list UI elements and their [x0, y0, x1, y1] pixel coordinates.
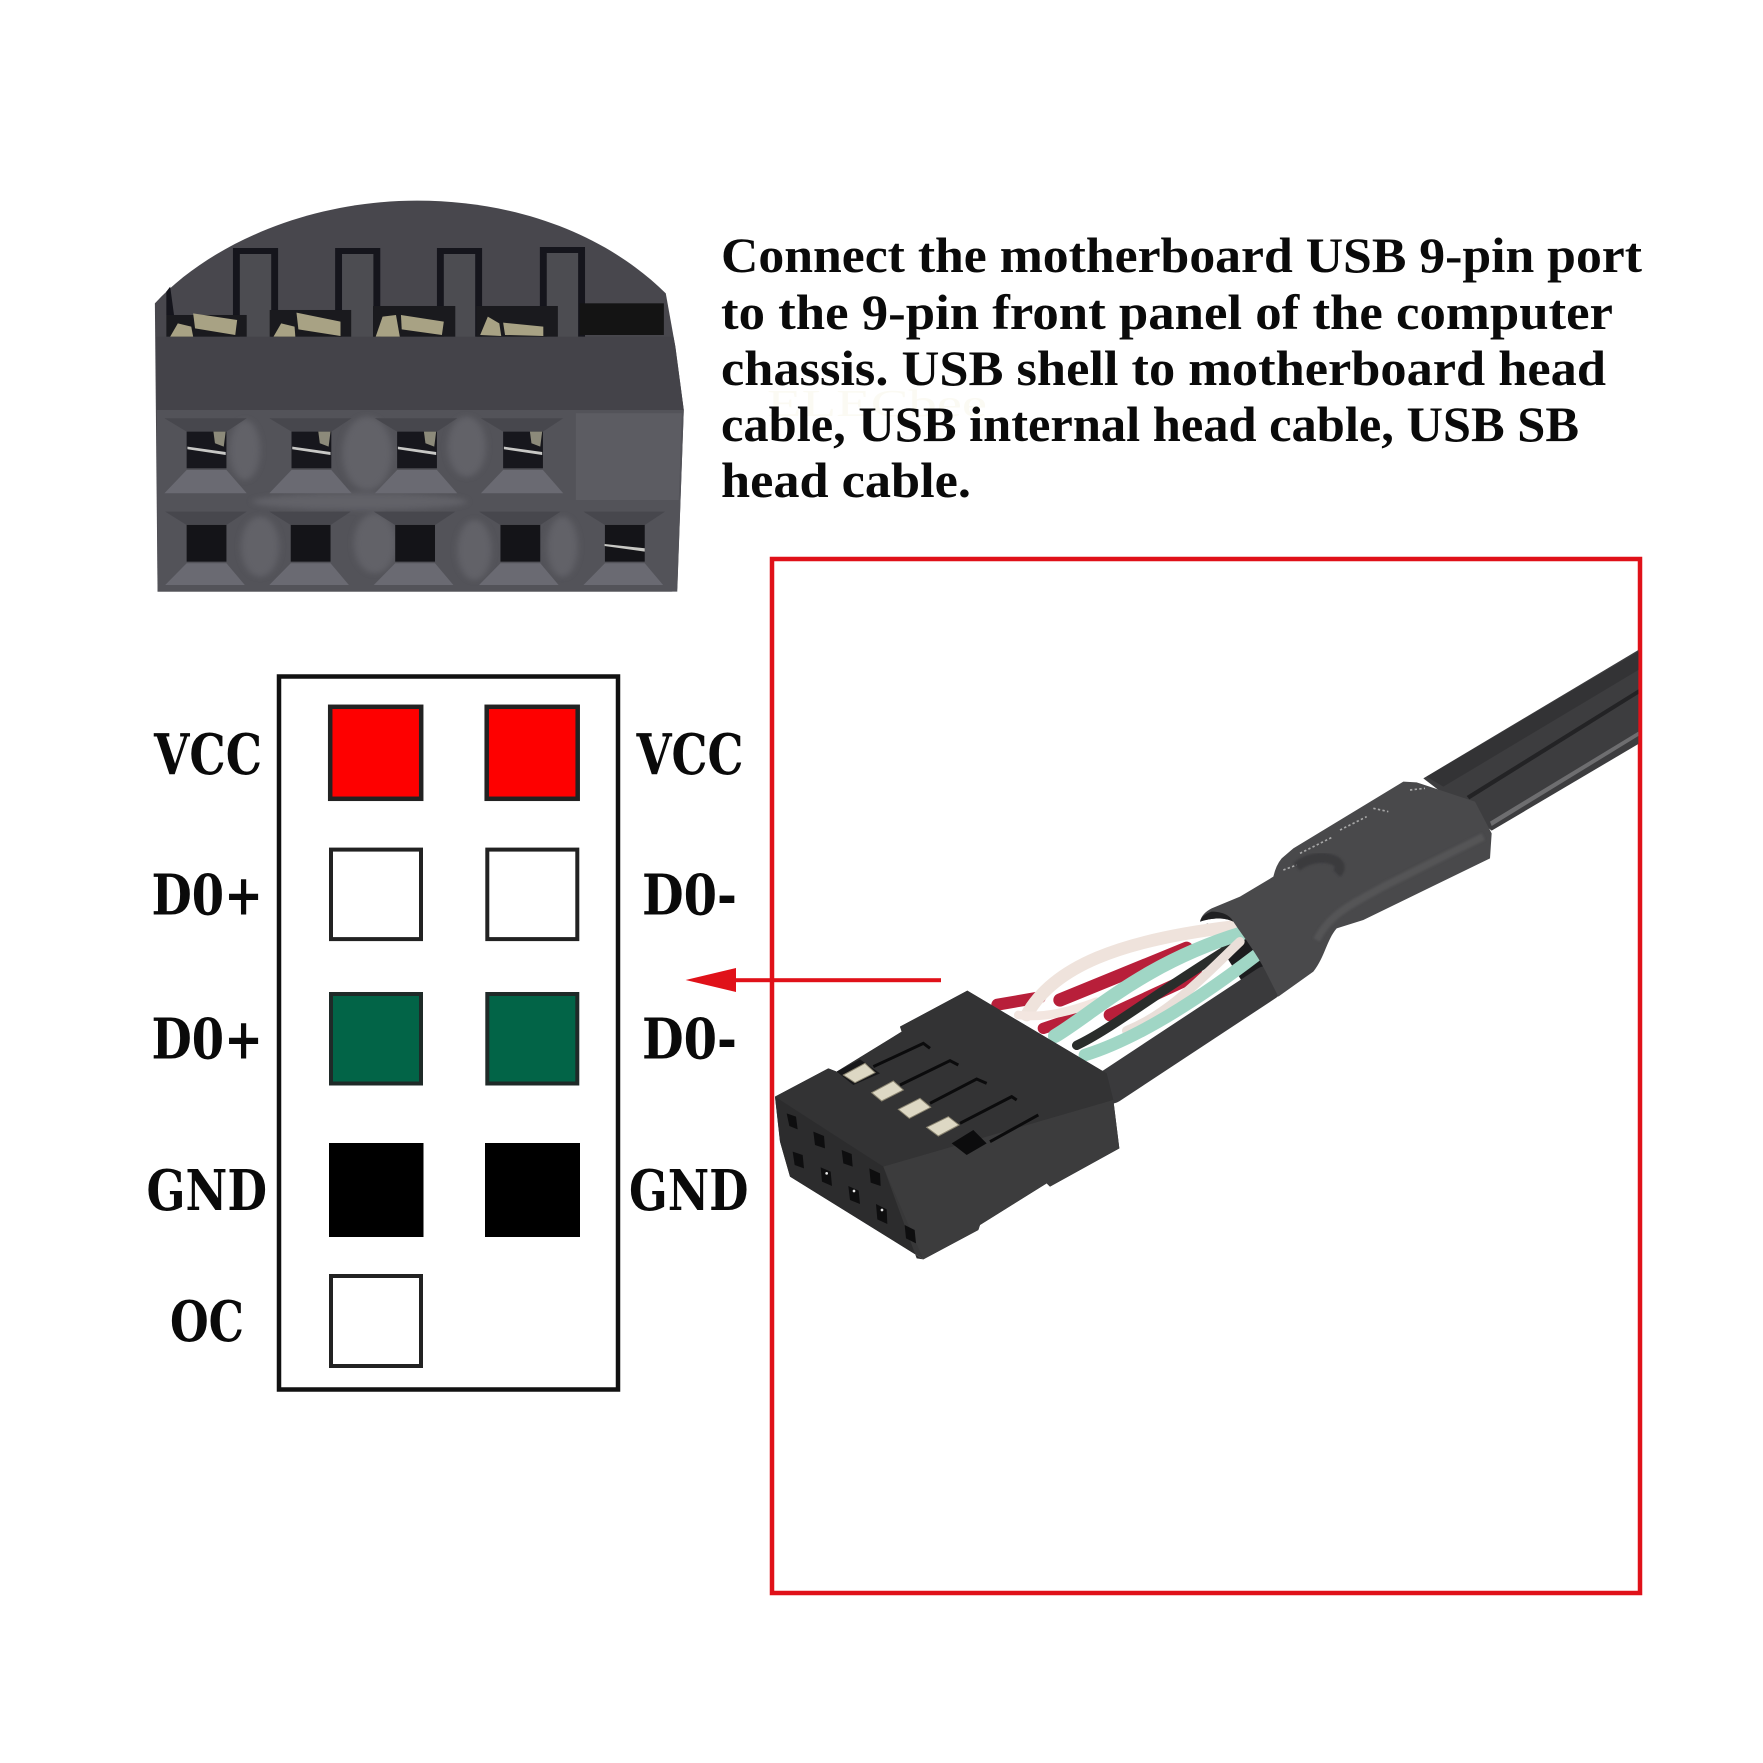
lower row of holes [165, 512, 665, 585]
front holes [787, 1113, 916, 1243]
left pin labels: D0+ [152, 862, 263, 928]
cables [1423, 650, 1638, 831]
patch at the blocked pin position [576, 413, 682, 500]
pinout outer box [279, 676, 618, 1390]
red arrow from connector to pinout [686, 968, 941, 992]
right pin labels: D0- [642, 1006, 737, 1072]
top slots [236, 250, 582, 337]
instruction text block: cable, USB internal head cable, USB SB [721, 396, 1579, 452]
pin contacts [843, 1063, 959, 1136]
connector housing [775, 991, 1119, 1259]
right pin labels: D0- [642, 862, 737, 928]
right pin labels [629, 722, 748, 1224]
photo: internal USB header cable [775, 650, 1638, 1259]
pinout diagram [146, 676, 748, 1390]
left pin labels: OC [170, 1289, 244, 1355]
pin row 1: VCC [330, 707, 578, 799]
right pin labels: GND [629, 1158, 748, 1224]
right pin labels: VCC [636, 722, 744, 788]
instruction text block: chassis. USB shell to motherboard head [721, 340, 1606, 396]
left pin labels: D0+ [152, 1006, 263, 1072]
left pin labels [146, 722, 267, 1355]
instruction text block: head cable. [721, 452, 971, 508]
instruction text block: Connect the motherboard USB 9-pin port [721, 227, 1642, 283]
pin row 4: ground [329, 1143, 580, 1237]
red frame around cable photo [772, 559, 1640, 1593]
pin row 5: OC [331, 1276, 421, 1366]
faint watermark: ELECbee [767, 383, 987, 425]
instruction text block: to the 9-pin front panel of the computer [721, 284, 1613, 340]
instruction text block [721, 227, 1642, 508]
wires [997, 923, 1270, 1087]
pin row 3: green data [331, 994, 577, 1084]
left pin labels: VCC [153, 722, 262, 788]
pin windows [166, 303, 664, 337]
pin row 2: white data [331, 850, 577, 939]
upper row of holes [164, 418, 563, 493]
photo: 9-pin connector front view [155, 201, 684, 592]
left pin labels: GND [146, 1158, 267, 1224]
heat shrink tube [1200, 782, 1492, 997]
